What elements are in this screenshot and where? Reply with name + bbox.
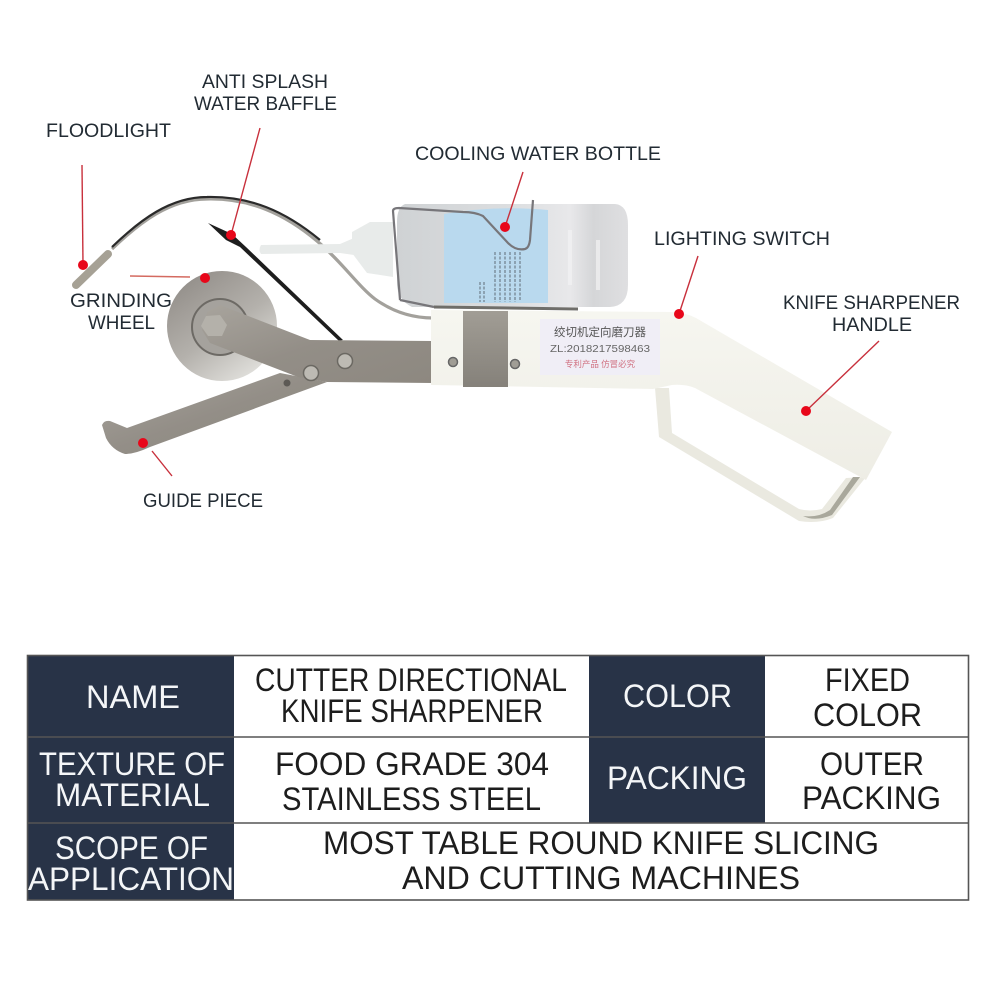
- row: material: PACKING: [607, 760, 747, 796]
- sticker warning: 专利产品 仿冒必究: [565, 359, 636, 369]
- row: name: CUTTER DIRECTIONAL: [255, 662, 567, 698]
- handle guard: [655, 388, 866, 522]
- product: knife sharpener: [76, 197, 892, 522]
- callout: guide piece: [138, 438, 172, 476]
- callout lines and dots: [78, 128, 879, 476]
- callout: baffle: [226, 128, 260, 240]
- arm: [202, 305, 432, 383]
- handle sticker: [540, 319, 660, 375]
- row: material: FOOD GRADE 304: [275, 746, 549, 782]
- row: material: TEXTURE OF: [39, 746, 225, 782]
- label: knife sharpener handle: KNIFE SHARPENER: [783, 292, 960, 314]
- label: lighting switch: LIGHTING SWITCH: [654, 228, 830, 250]
- row: scope: APPLICATION: [28, 861, 234, 897]
- row: name: COLOR: [623, 678, 732, 714]
- label: floodlight: FLOODLIGHT: [46, 120, 171, 142]
- label: anti splash water baffle: ANTI SPLASH: [202, 71, 328, 93]
- label: guide piece: GUIDE PIECE: [143, 490, 263, 512]
- handle screws: [448, 358, 520, 368]
- label: knife sharpener handle: HANDLE: [832, 314, 912, 336]
- handle body: [431, 310, 892, 480]
- bottle cap: [352, 222, 393, 277]
- arm bolts: [304, 354, 352, 380]
- bottle label: [444, 208, 548, 303]
- flexible floodlight hose: [112, 197, 433, 318]
- row: material: PACKING: [802, 780, 941, 816]
- wheel bolt: [201, 315, 227, 336]
- specification table: [27, 655, 968, 900]
- wheel hub: [192, 299, 248, 355]
- row: scope: SCOPE OF: [55, 830, 208, 866]
- row: scope: AND CUTTING MACHINES: [402, 860, 800, 896]
- wire bottle holder: [393, 200, 533, 307]
- table grid: [27, 656, 968, 900]
- callout: grinding wheel: [130, 273, 210, 283]
- floodlight head: [76, 254, 108, 285]
- mount clip: [463, 311, 508, 387]
- row: name: COLOR: [813, 697, 922, 733]
- water baffle: [208, 223, 343, 341]
- water bottle: [397, 204, 628, 307]
- row: name: NAME: [86, 679, 180, 715]
- row: name: FIXED: [825, 662, 910, 698]
- label: knife sharpener handle: [783, 292, 960, 336]
- labels: [46, 71, 960, 512]
- bottle label print: [480, 252, 520, 302]
- holder base plate: [434, 307, 578, 309]
- label: grinding wheel: [70, 290, 172, 334]
- row: material: [39, 746, 941, 817]
- label: grinding wheel: GRINDING: [70, 290, 172, 312]
- row: material: STAINLESS STEEL: [282, 781, 541, 817]
- table header cells: [27, 655, 765, 900]
- row: name: [86, 662, 922, 733]
- bottle ridges: [570, 230, 598, 290]
- row: material: OUTER: [820, 746, 924, 782]
- grinding wheel: [167, 271, 277, 381]
- guard inner metal: [803, 477, 860, 519]
- sticker title: 绞切机定向磨刀器: [554, 325, 646, 339]
- label: anti splash water baffle: WATER BAFFLE: [194, 93, 337, 115]
- callout: floodlight: [78, 165, 88, 270]
- callout: bottle: [500, 172, 523, 232]
- row: scope: [28, 825, 879, 897]
- label: cooling water bottle: COOLING WATER BOTTLE: [415, 143, 661, 165]
- bottle nozzle: [260, 238, 354, 255]
- row: scope: MOST TABLE ROUND KNIFE SLICING: [323, 825, 879, 861]
- label: grinding wheel: WHEEL: [88, 312, 155, 334]
- callout: handle: [801, 341, 879, 416]
- row: material: MATERIAL: [55, 777, 210, 813]
- callout: lighting switch: [674, 256, 698, 319]
- label: anti splash water baffle: [194, 71, 337, 115]
- row: name: KNIFE SHARPENER: [281, 693, 543, 729]
- guide piece: [102, 373, 327, 454]
- sticker number: ZL:2018217598463: [550, 344, 651, 355]
